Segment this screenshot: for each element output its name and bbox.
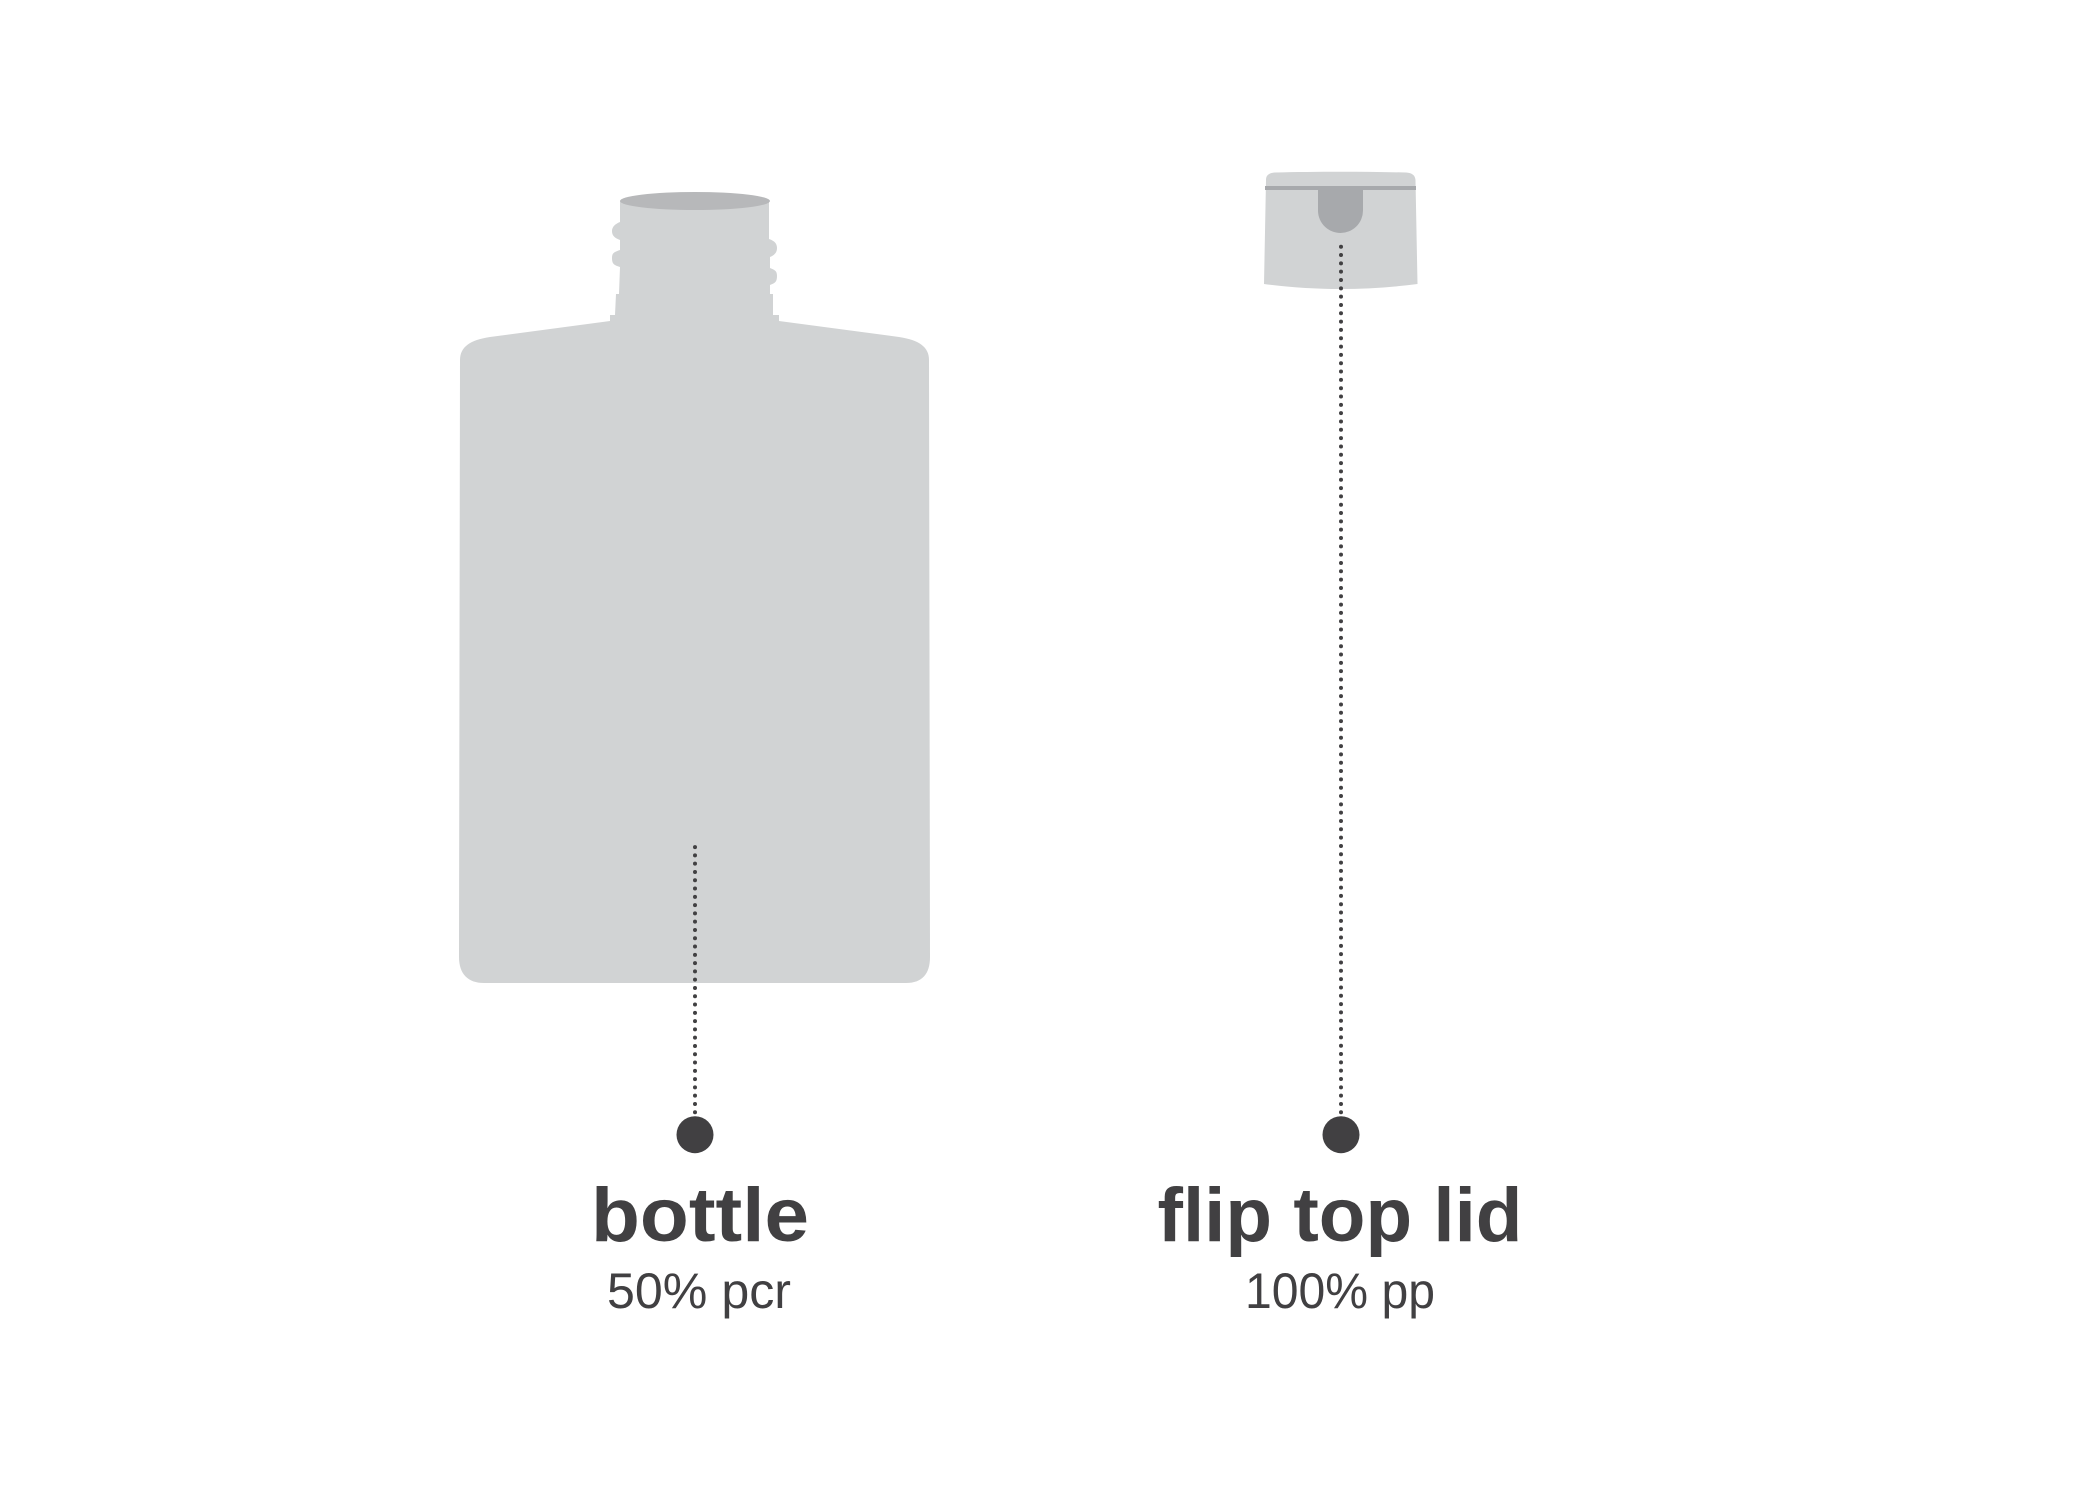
- material label: 100% pp: 100% pp: [1245, 1263, 1435, 1319]
- bottle opening ellipse: [620, 192, 770, 210]
- material label: 50% pcr: 50% pcr: [607, 1263, 791, 1319]
- panel: bottle component: [459, 192, 930, 1319]
- lid thumb notch: [1318, 188, 1363, 233]
- dotted leader line: bottle: [693, 847, 697, 1113]
- heading: bottle: bottle: [591, 1173, 809, 1258]
- panel: flip top lid component: [1158, 172, 1522, 1319]
- lid seam band: [1265, 186, 1416, 190]
- marker dot: lid: [1322, 1116, 1360, 1153]
- dotted leader line: lid: [1339, 247, 1343, 1113]
- heading: flip top lid: flip top lid: [1158, 1173, 1522, 1258]
- icon: bottle silhouette: [459, 192, 930, 983]
- icon: flip top lid: [1264, 172, 1418, 289]
- marker dot: bottle: [676, 1116, 714, 1153]
